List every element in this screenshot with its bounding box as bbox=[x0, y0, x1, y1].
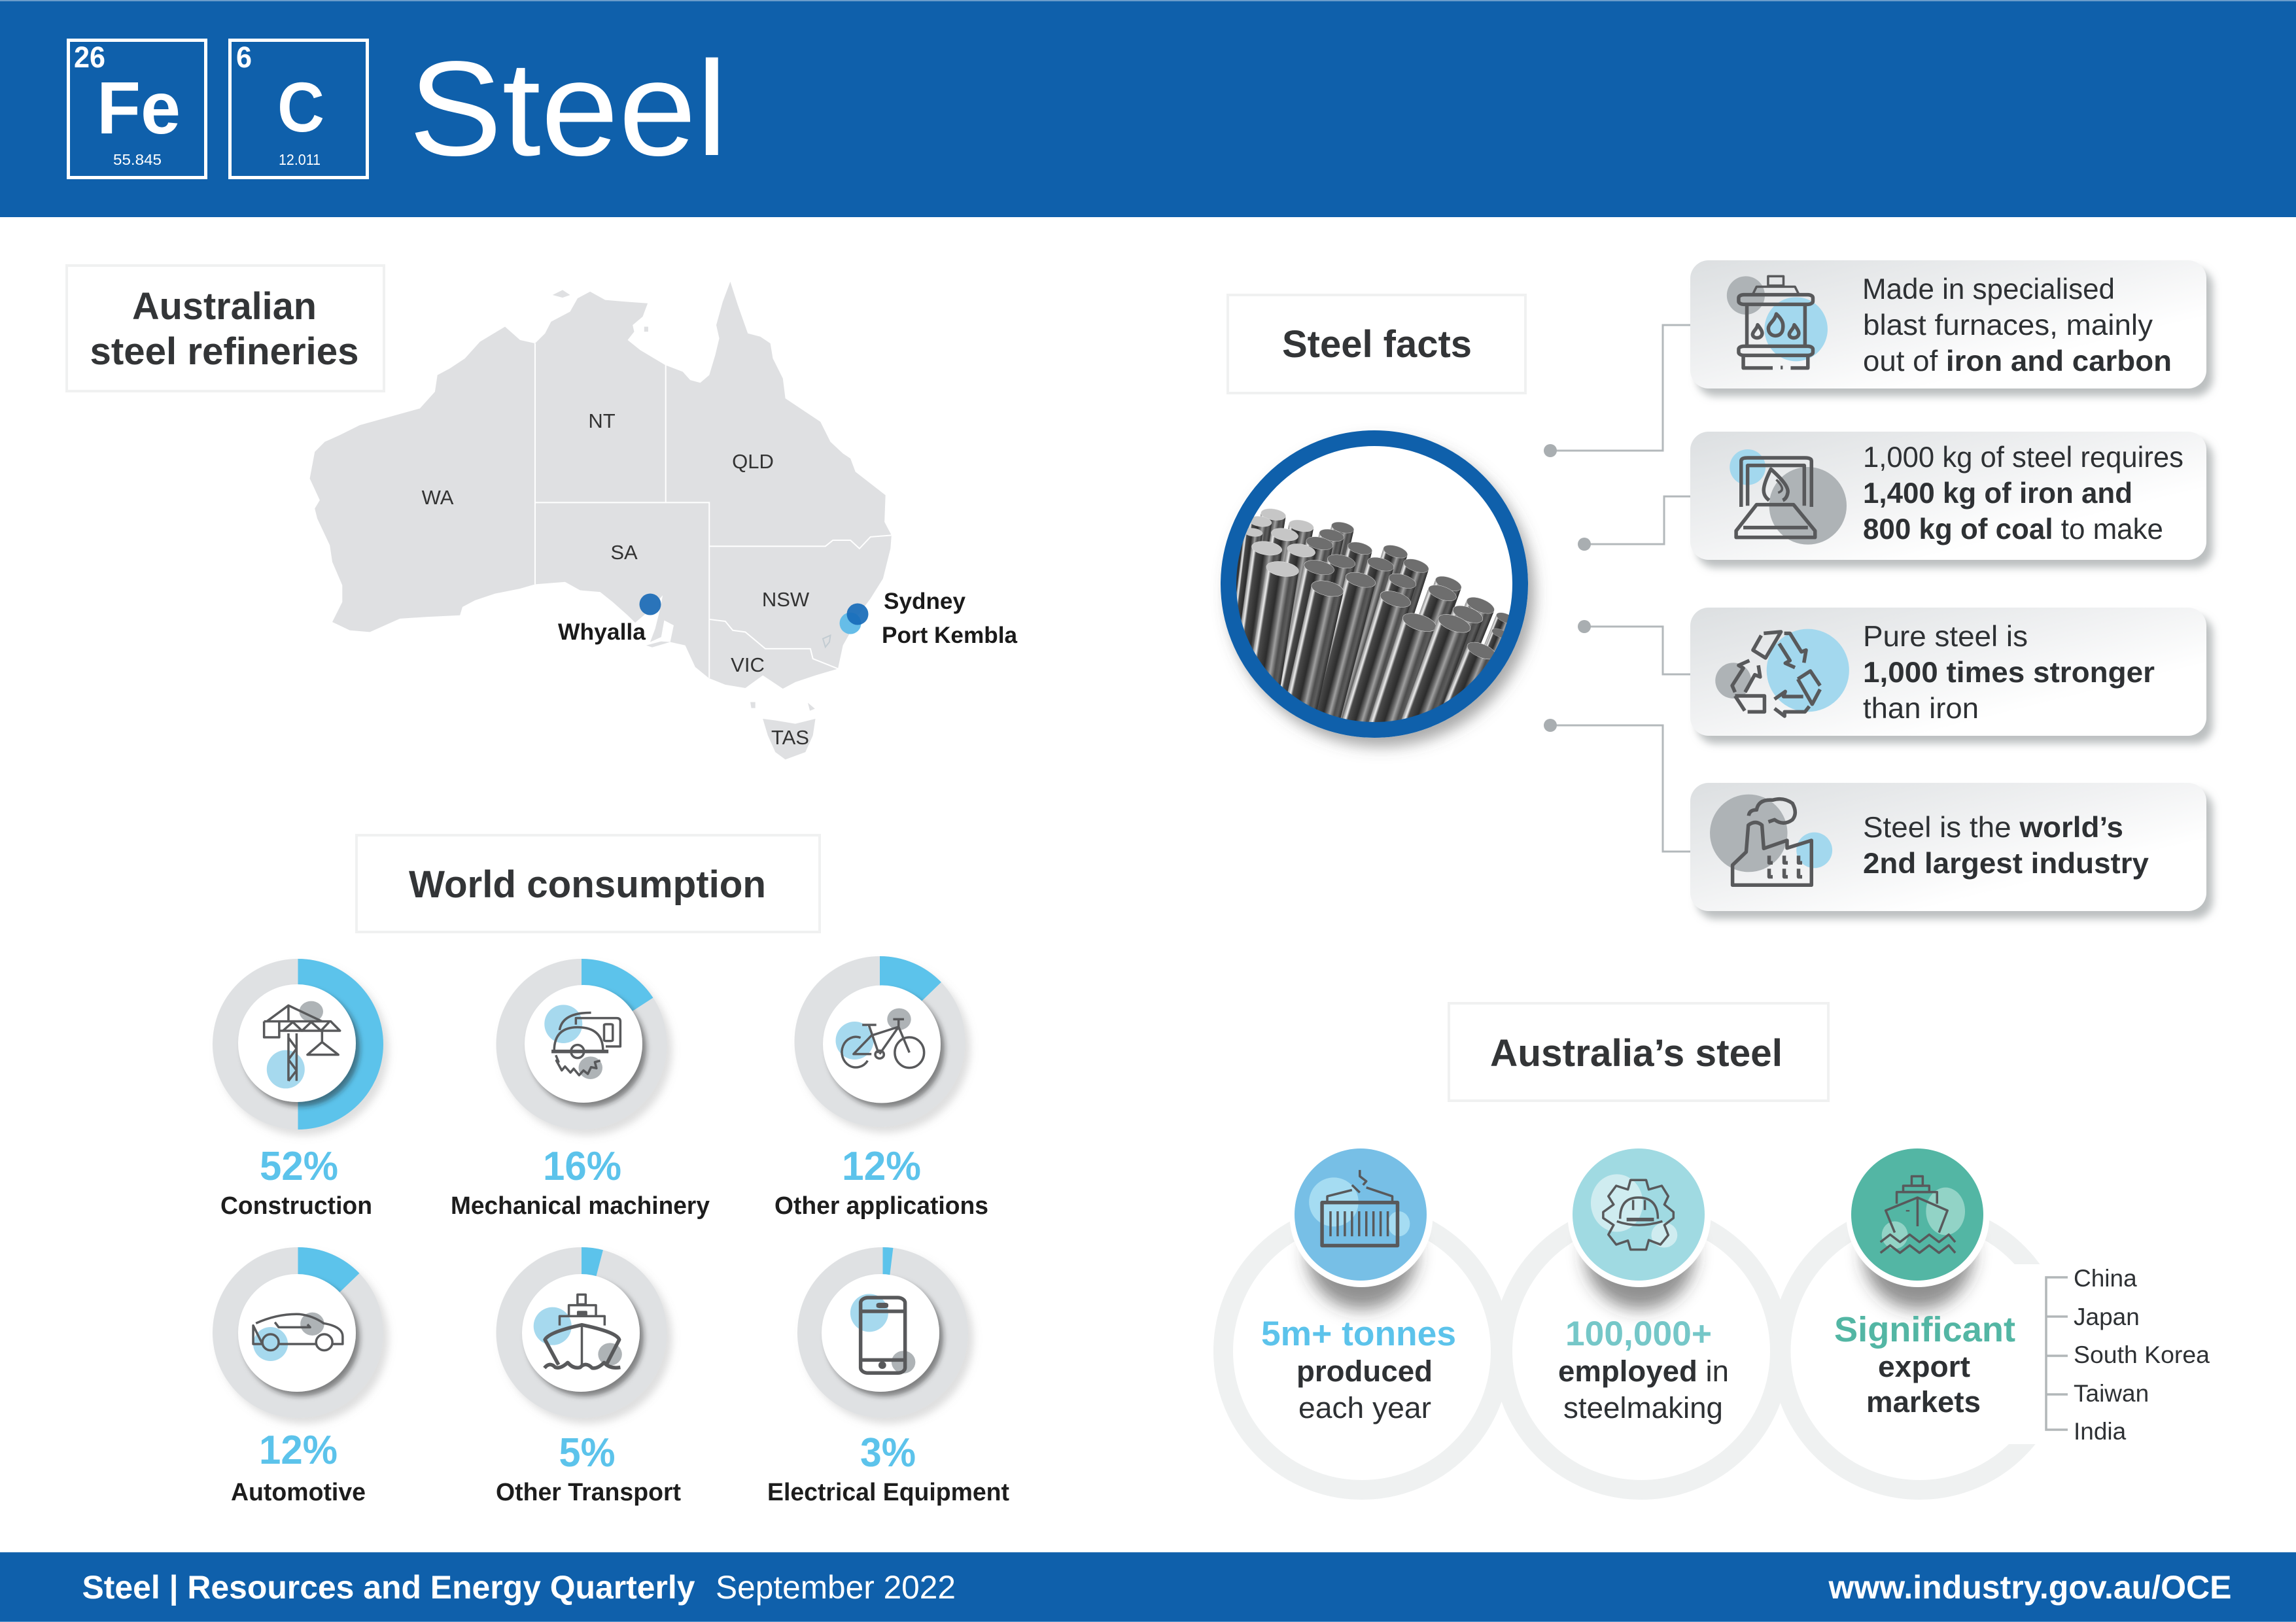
element tile: C bbox=[230, 41, 368, 178]
connector: fact 1 bbox=[1544, 325, 1690, 457]
footer url: www.industry.gov.au/OCE bbox=[1828, 1569, 2232, 1606]
value: 3% bbox=[860, 1430, 916, 1475]
label: Electrical Equipment bbox=[767, 1479, 1009, 1506]
text: 1,000 kg of steel requires bbox=[1863, 441, 2183, 474]
text: blast furnaces, mainly bbox=[1863, 309, 2153, 341]
marker: Port Kembla: Port Kembla bbox=[882, 623, 1018, 648]
text: steelmaking bbox=[1563, 1391, 1723, 1424]
state labels: NT bbox=[588, 409, 616, 432]
list: export destinations: South Korea bbox=[2074, 1341, 2210, 1368]
icon: phone bbox=[850, 1294, 915, 1373]
state labels: WA bbox=[422, 486, 454, 509]
heading: Steel facts bbox=[1228, 295, 1525, 393]
title: Steel bbox=[409, 33, 727, 184]
text bbox=[1834, 1310, 2015, 1419]
text bbox=[1862, 273, 2172, 377]
element tile: Fe bbox=[68, 41, 205, 178]
state labels: QLD bbox=[732, 450, 774, 473]
marker: Port Kembla bbox=[840, 612, 1018, 648]
icon: kiln bbox=[1730, 449, 1847, 545]
text: 5m+ tonnes bbox=[1261, 1315, 1456, 1353]
state labels: SA bbox=[610, 541, 638, 564]
heading: Steel facts: Steel facts bbox=[1282, 323, 1472, 366]
heading: Australia's steel bbox=[1449, 1003, 1828, 1101]
panel: Australian steel refineries bbox=[67, 266, 1018, 759]
icon: crane bbox=[264, 1001, 340, 1088]
marker: Whyalla bbox=[558, 594, 661, 645]
icon: factory bbox=[1710, 795, 1832, 885]
icon: ship bbox=[534, 1294, 622, 1368]
donut: Electrical Equipment 3% bbox=[767, 1247, 1009, 1506]
state labels: NSW bbox=[762, 588, 810, 611]
connector: fact 4 bbox=[1544, 719, 1690, 852]
footer band bbox=[0, 1552, 2296, 1622]
footer date: September 2022 bbox=[716, 1569, 956, 1606]
list: export destinations: China bbox=[2074, 1265, 2137, 1292]
element tile: C: 12.011 bbox=[279, 151, 321, 168]
text: Significant bbox=[1834, 1310, 2015, 1349]
heading: Australian steel refineries bbox=[67, 266, 384, 391]
icon: cargo ship bbox=[1881, 1176, 1965, 1253]
fact card: iron and coal bbox=[1690, 432, 2213, 568]
value: 12% bbox=[842, 1144, 921, 1189]
text bbox=[1261, 1315, 1456, 1424]
label: Other Transport bbox=[496, 1479, 681, 1506]
text: 1,400 kg of iron and bbox=[1863, 477, 2132, 509]
marker: Sydney bbox=[846, 589, 966, 625]
value: 52% bbox=[260, 1144, 338, 1189]
label: Automotive bbox=[231, 1479, 366, 1506]
text: export bbox=[1878, 1350, 1970, 1383]
text: than iron bbox=[1863, 693, 1979, 725]
icon: bicycle bbox=[836, 1009, 924, 1068]
stat: employment bbox=[1558, 1144, 1729, 1424]
element tile: C: 6 bbox=[236, 41, 252, 74]
icon: furnace bbox=[1727, 276, 1828, 368]
fact card: 2nd largest industry bbox=[1690, 783, 2213, 919]
text: employed in bbox=[1558, 1355, 1729, 1388]
element tile: Fe: 26 bbox=[74, 41, 105, 74]
text: 100,000+ bbox=[1565, 1315, 1712, 1353]
element tile: C: C bbox=[277, 67, 324, 147]
marker: Sydney: Sydney bbox=[884, 589, 966, 614]
label: Mechanical machinery bbox=[451, 1192, 710, 1220]
state labels: VIC bbox=[731, 653, 765, 676]
label: Construction bbox=[220, 1192, 372, 1220]
list: export destinations: Japan bbox=[2074, 1303, 2140, 1330]
value: 5% bbox=[559, 1430, 615, 1475]
list: export destinations: Taiwan bbox=[2074, 1380, 2149, 1407]
heading: Australia's steel: Australia’s steel bbox=[1490, 1032, 1783, 1075]
state labels: TAS bbox=[771, 726, 809, 749]
panel: Australia's steel bbox=[1223, 1003, 2210, 1490]
text: 800 kg of coal to make bbox=[1863, 513, 2163, 545]
footer title: Steel | Resources and Energy Quarterly bbox=[82, 1569, 695, 1606]
text: out of iron and carbon bbox=[1863, 345, 2172, 377]
state labels bbox=[422, 409, 810, 749]
map of Australia bbox=[310, 282, 892, 759]
donut: Mechanical machinery 16% bbox=[451, 959, 710, 1220]
panel: World consumption bbox=[213, 835, 1009, 1506]
text: Pure steel is bbox=[1863, 621, 2028, 653]
text bbox=[1863, 621, 2155, 725]
heading: Australian steel refineries: Australian bbox=[132, 285, 317, 328]
element tile: Fe: 55.845 bbox=[113, 151, 162, 168]
icon: gear and helmet bbox=[1591, 1174, 1677, 1250]
fact card: stronger than iron bbox=[1690, 608, 2213, 744]
text: markets bbox=[1866, 1385, 1981, 1419]
rings bbox=[1223, 1213, 2083, 1490]
text bbox=[1558, 1315, 1729, 1424]
text: 2nd largest industry bbox=[1863, 848, 2149, 880]
donut: Other Transport 5% bbox=[496, 1247, 681, 1506]
photo: steel rods in circle bbox=[1218, 430, 1544, 756]
list: export destinations: India bbox=[2074, 1418, 2127, 1445]
donut: Other applications 12% bbox=[774, 956, 988, 1220]
icon: shipping container bbox=[1309, 1170, 1410, 1245]
donut: Automotive 12% bbox=[213, 1247, 383, 1506]
fact card: blast furnaces bbox=[1690, 260, 2213, 396]
heading: World consumption: World consumption bbox=[409, 863, 766, 906]
text: Steel is the world’s bbox=[1863, 812, 2123, 844]
text bbox=[1863, 812, 2149, 880]
list: export destinations bbox=[2046, 1265, 2210, 1445]
heading: World consumption bbox=[357, 835, 820, 932]
text: each year bbox=[1298, 1391, 1431, 1424]
icon: saw bbox=[544, 1005, 620, 1079]
stat: export markets bbox=[1834, 1144, 2015, 1419]
heading: Australian steel refineries: steel refineries bbox=[90, 330, 358, 373]
value: 16% bbox=[543, 1144, 621, 1189]
donut: Construction 52% bbox=[213, 959, 383, 1220]
text: 1,000 times stronger bbox=[1863, 657, 2155, 689]
value: 12% bbox=[259, 1428, 338, 1473]
element tile: Fe: Fe bbox=[97, 67, 181, 149]
header band bbox=[0, 0, 2296, 217]
panel: Steel facts bbox=[1218, 260, 2218, 923]
text bbox=[1863, 441, 2183, 545]
connector: fact 3 bbox=[1578, 620, 1690, 674]
text: produced bbox=[1296, 1355, 1433, 1388]
label: Other applications bbox=[774, 1192, 988, 1220]
text: Made in specialised bbox=[1862, 273, 2115, 305]
stat: production bbox=[1261, 1144, 1456, 1424]
icon: car bbox=[253, 1313, 343, 1361]
marker: Whyalla: Whyalla bbox=[558, 619, 646, 645]
icon: recycle bbox=[1715, 629, 1849, 716]
connector: fact 2 bbox=[1578, 496, 1690, 551]
